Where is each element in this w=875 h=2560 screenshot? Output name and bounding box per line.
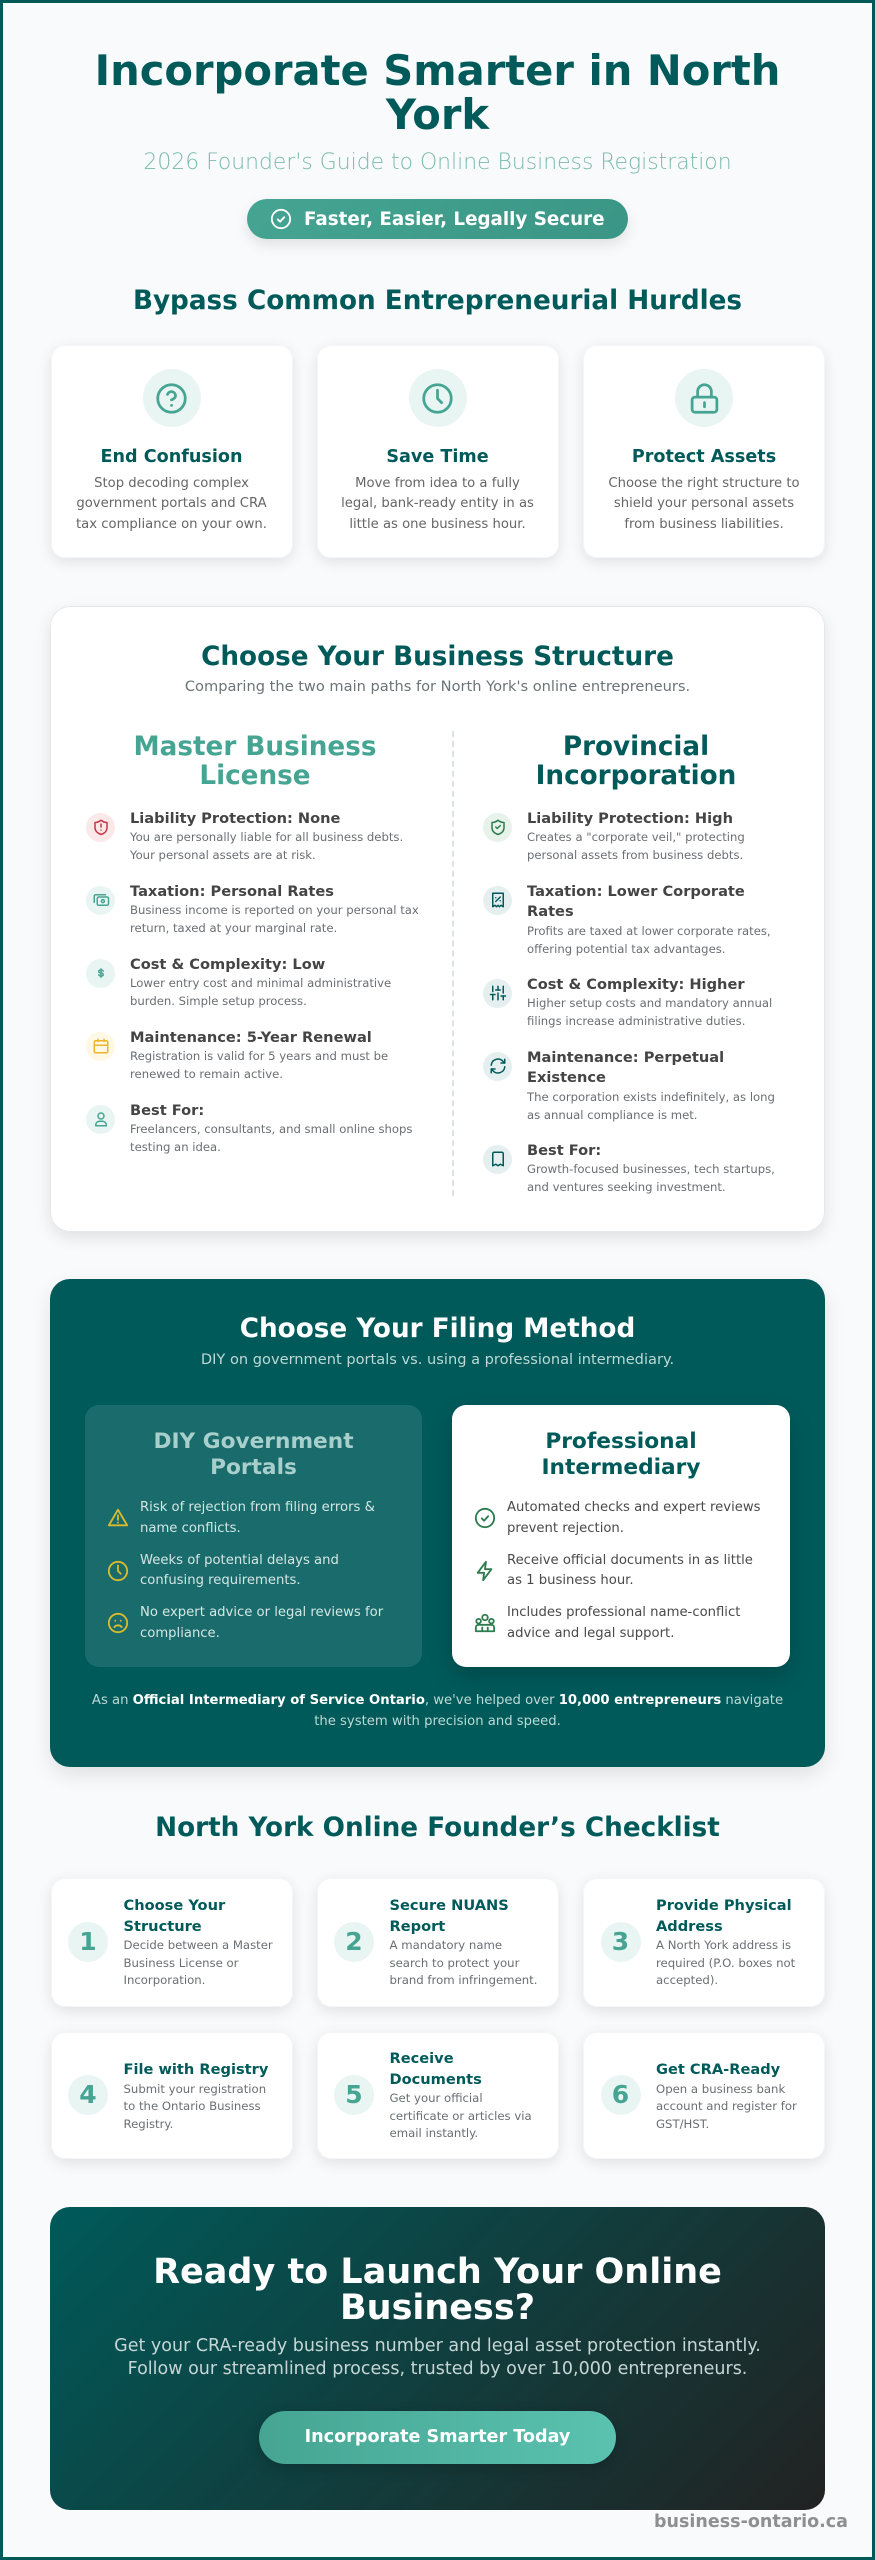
step text: A mandatory name [390,1938,502,1952]
item text [526,1049,775,1122]
icon: dollar [86,959,115,988]
item text: Freelancers, consultants, and small online shops [130,1122,412,1136]
item text [130,956,391,1008]
column heading: provincial incorporation: Incorporation [536,761,736,791]
item text: Maintenance: Perpetual [527,1049,724,1066]
item text: Lower entry cost and minimal administrative [130,976,391,990]
item text: Your personal assets are at risk. [130,848,316,862]
icon: clock [108,1560,128,1582]
number badge: 1 [79,1927,97,1956]
icon: shield alert [86,813,115,842]
step text [656,2060,797,2133]
list item: fast documents: Receive official documents in as little [507,1552,753,1568]
column heading: master business license: Master Business [134,732,376,762]
heading: Choose Your Business Structure [201,642,674,672]
card text [76,476,267,532]
step 2 [316,1878,558,2007]
number badge [68,1922,108,1962]
number badge [68,2075,108,2115]
trust statement: the system with precision and speed. [314,1714,561,1728]
step text: Submit your registration [124,2082,266,2096]
list item: no advice: compliance. [140,1626,220,1640]
title [95,46,780,139]
list item: checks [474,1500,761,1536]
step text: Receive [390,2050,454,2067]
item text: Existence [527,1069,606,1086]
item text: testing an idea. [130,1140,221,1154]
list item: delays [108,1552,339,1588]
list item: legal support: advice and legal support. [507,1626,674,1640]
list item: no advice [108,1605,384,1640]
panel: DIY portals [85,1405,422,1667]
card text: Choose the right structure to [608,476,800,491]
badge text: Faster, Easier, Legally Secure [304,209,605,230]
item text: Profits are taxed at lower corporate rates, [527,924,771,938]
list item: legal support: Includes professional name-conflict [507,1605,740,1620]
step text: File with Registry [124,2061,268,2078]
list item: no advice: No expert advice or legal reviews for [140,1605,383,1620]
icon: refresh [483,1052,512,1081]
icon: cash [86,886,115,915]
subheading: Comparing the two main paths for North York's online entrepreneurs. [185,678,690,695]
list item: rejection: Risk of rejection from filing errors & [140,1500,375,1515]
item text [130,1029,388,1081]
item text: Liability Protection: None [130,810,340,827]
item: liability none [86,810,403,862]
panel: protect assets [583,345,825,558]
card text: Move from idea to a fully [355,476,520,491]
card title: Protect Assets [632,447,776,467]
watermark: business-ontario.ca [654,2512,848,2532]
list item: delays: confusing requirements. [140,1573,301,1588]
item text: The corporation exists indefinitely, as long [527,1090,775,1104]
step text: to the Ontario Business [124,2099,261,2113]
step text: Secure NUANS [390,1897,509,1914]
CTA text [50,2335,825,2381]
item text: Creates a "corporate veil," protecting [527,830,745,844]
item text: offering potential tax advantages. [527,942,726,956]
item text [527,883,771,956]
icon: sad face [108,1612,128,1634]
item text: Rates [527,903,574,920]
item: taxation personal [86,883,419,935]
icon: lightning [476,1560,492,1582]
trust statement [50,1691,825,1732]
title: York [386,90,489,139]
icon: check [474,1508,496,1528]
card title: End Confusion [100,447,243,467]
icon: receipt percent [483,886,512,915]
step text [390,2049,532,2142]
CTA text: Get your CRA-ready business number and legal asset protection instantly. [114,2336,761,2356]
number badge [600,2075,640,2115]
item: liability high [483,810,745,862]
step text: Address [656,1918,723,1934]
item: best for [86,1102,412,1154]
card heading: DIY Government [153,1429,354,1454]
CTA heading: Ready to Launch Your Online [153,2252,722,2292]
item text: as annual compliance is met. [527,1108,698,1122]
item text: personal assets from business debts. [527,848,743,862]
item text: Cost & Complexity: Low [130,956,325,973]
item text [130,883,419,935]
card text: Stop decoding complex [94,476,249,491]
number badge: 2 [345,1927,363,1956]
item text [527,976,772,1028]
item text: burden. Simple setup process. [130,994,307,1008]
item text: Growth-focused businesses, tech startups, [527,1162,775,1176]
step text: Decide between a Master [124,1938,273,1952]
icon: people [474,1612,496,1634]
card text: from business liabilities. [624,517,784,532]
item text: Liability Protection: High [527,810,733,827]
step 4 [50,2032,292,2159]
item text: Taxation: Lower Corporate [527,883,745,900]
icon: lock [675,369,733,427]
step text: Get your official [390,2091,483,2105]
item text [130,810,403,862]
item text: Taxation: Personal Rates [130,883,334,900]
panel: professional intermediary [452,1405,790,1667]
step text: Business License or [124,1956,238,1970]
step text: Open a business bank [656,2082,785,2096]
item text: Best For: [527,1142,601,1159]
step text: required (P.O. boxes not [656,1956,795,1970]
list item: legal support [474,1605,740,1640]
step text: GST/HST. [656,2116,709,2130]
number badge: 4 [79,2080,97,2109]
panel: call to action [50,2207,825,2510]
heading: bypass hurdles: Bypass Common Entrepreneurial Hurdles [133,286,742,316]
card heading [541,1429,700,1480]
card text: legal, bank-ready entity in as [341,496,534,511]
CTA button: Incorporate Smarter Today [305,2427,570,2447]
panel: business structure comparison [50,606,825,1232]
step text [656,1896,795,1990]
item text: return, taxed at your marginal rate. [130,921,337,935]
card text: tax compliance on your own. [76,517,267,532]
column heading: provincial incorporation: Provincial [563,732,709,762]
item: cost low [86,956,391,1008]
step text: Incorporation. [124,1973,205,1987]
list item: rejection [108,1500,375,1536]
divider [452,731,454,1196]
list item: rejection: name conflicts. [140,1520,241,1536]
subheading: DIY on government portals vs. using a professional intermediary. [201,1351,674,1368]
item text: Cost & Complexity: Higher [527,976,745,993]
icon: shield check [483,813,512,842]
step text: search to protect your [390,1956,519,1970]
heading: checklist: North York Online Founder’s Checklist [155,1813,720,1843]
number badge [334,1922,374,1962]
step text: Choose Your [124,1897,225,1914]
item text [130,1102,412,1154]
item text: Maintenance: 5-Year Renewal [130,1029,372,1046]
item text [527,1142,775,1194]
list item: delays: Weeks of potential delays and [140,1552,339,1568]
panel: end confusion [50,345,292,558]
item text: You are personally liable for all business debts. [130,830,403,844]
step text: brand from infringement. [390,1973,537,1987]
list item: checks: prevent rejection. [507,1520,624,1536]
number badge: 3 [612,1927,629,1956]
card heading [153,1429,354,1480]
list item: checks: Automated checks and expert reviews [507,1500,761,1515]
item text: Business income is reported on your personal tax [130,903,419,917]
item: best for growth [483,1142,775,1194]
heading: Choose Your Filing Method [240,1314,635,1344]
step 3 [583,1878,825,2007]
trust statement: As an Official Intermediary of Service Ontario, we've helped over 10,000 entrepreneurs navigate [92,1693,783,1708]
step text: accepted). [656,1973,718,1987]
badge: faster easier legally secure [247,199,628,239]
icon: sliders [483,979,512,1008]
CTA heading: Business? [340,2288,535,2328]
step text: A North York address is [656,1938,791,1952]
list item: fast documents [476,1552,753,1588]
number badge: 6 [612,2080,629,2109]
step text: account and register for [656,2099,797,2113]
icon: user [86,1105,115,1134]
number badge: 5 [345,2080,363,2109]
step text: certificate or articles via [390,2108,532,2122]
list item: fast documents: as 1 business hour. [507,1573,634,1588]
item text: renewed to remain active. [130,1067,283,1081]
card title: Save Time [386,447,489,467]
column heading: master business license [134,732,376,791]
step text: Provide Physical [656,1897,792,1914]
step text [390,1896,537,1990]
step text: Get CRA-Ready [656,2061,780,2078]
item text: Higher setup costs and mandatory annual [527,996,772,1010]
panel: filing method [50,1279,825,1767]
step text: email instantly. [390,2126,478,2140]
item text: Registration is valid for 5 years and must be [130,1049,388,1063]
item text [527,810,745,862]
card text: little as one business hour. [349,517,526,532]
CTA text: Follow our streamlined process, trusted by over 10,000 entrepreneurs. [128,2359,747,2379]
item: cost higher [483,976,772,1028]
step text [124,2060,268,2133]
panel: save time [316,345,558,558]
item: maintenance perpetual [483,1049,775,1122]
card text [341,476,534,532]
icon: question [142,369,200,427]
step 6 [583,2032,825,2159]
item: taxation corporate [483,883,771,956]
step text: Report [390,1918,445,1934]
icon: bookmark [483,1145,512,1174]
column heading: master business license: License [199,761,311,791]
CTA button [259,2411,616,2464]
card text: government portals and CRA [76,496,267,511]
number badge [600,1922,640,1962]
CTA heading [50,2254,825,2326]
icon: check circle [270,208,292,230]
number badge [334,2075,374,2115]
step 5 [316,2032,558,2159]
card text [608,476,800,532]
step text: Registry. [124,2116,173,2130]
step text: Structure [124,1918,202,1934]
column heading: provincial incorporation [536,732,736,791]
card text: shield your personal assets [614,496,794,511]
card heading: Intermediary [541,1455,700,1480]
item text: Best For: [130,1102,204,1119]
item text: and ventures seeking investment. [527,1180,726,1194]
item: maintenance renewal [86,1029,388,1081]
icon: calendar [86,1032,115,1061]
card heading: Professional [545,1429,697,1454]
icon: clock [408,369,466,427]
item text: filings increase administrative duties. [527,1014,745,1028]
step text [124,1896,273,1990]
title: Incorporate Smarter in North [95,46,780,95]
icon: warning [108,1508,128,1526]
subtitle: 2026 Founder's Guide to Online Business Registration [143,150,732,175]
step text: Documents [390,2070,482,2088]
step 1 [50,1878,292,2007]
card heading: Portals [210,1455,297,1480]
